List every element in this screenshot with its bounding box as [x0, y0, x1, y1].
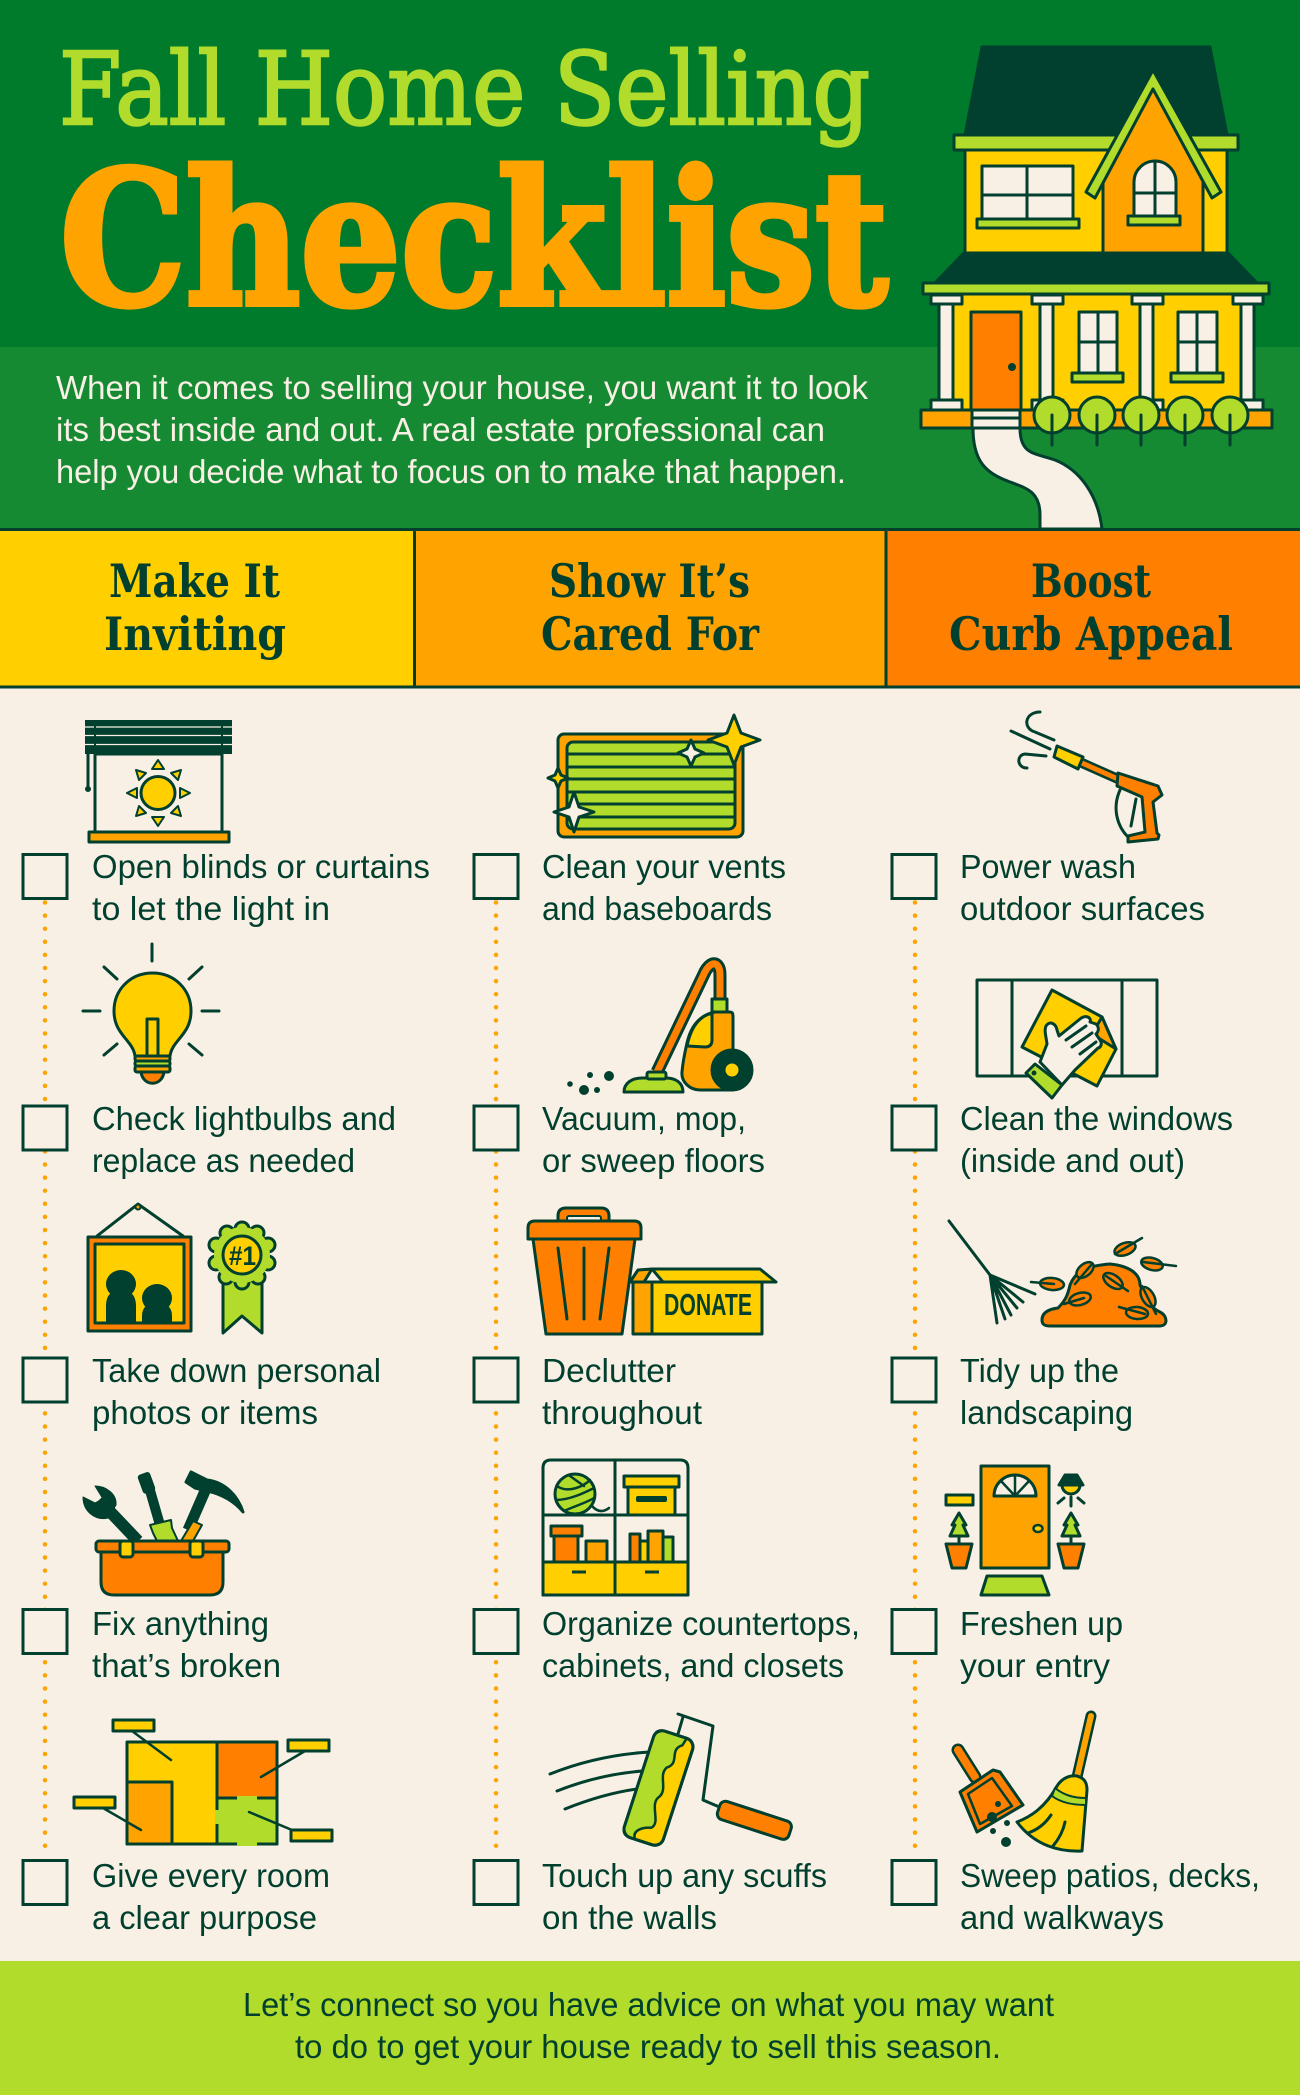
checklist item: entry: your entry: [960, 1647, 1111, 1684]
checklist item: power wash: outdoor surfaces: [960, 890, 1205, 927]
checklist item: lightbulbs: Check lightbulbs and: [92, 1100, 396, 1137]
gable: [1103, 87, 1203, 253]
gable trim: [1086, 70, 1221, 198]
column heading: Make It Inviting: Inviting: [104, 607, 286, 661]
icon: pressure washer: [1011, 712, 1162, 842]
checklist item: windows: Clean the windows: [960, 1100, 1233, 1137]
icon: vacuum cleaner: [567, 964, 752, 1095]
checklist item: scuffs: [474, 1857, 827, 1936]
checklist item: entry: Freshen up: [960, 1605, 1123, 1642]
icon: clean vent with sparkles: [548, 715, 760, 837]
checklist item: landscaping: landscaping: [960, 1394, 1133, 1431]
checklist item: declutter: throughout: [542, 1394, 702, 1431]
porch eave: [923, 283, 1269, 294]
column heading: Boost Curb Appeal: Boost: [1031, 554, 1152, 608]
upper left window: [977, 166, 1079, 228]
dotted connector: column 1: [43, 902, 47, 1858]
checklist item: organize: Organize countertops,: [542, 1605, 860, 1642]
checklist item: windows: (inside and out): [960, 1142, 1185, 1179]
front door: [971, 312, 1021, 410]
foundation: [921, 410, 1272, 428]
checklist item: personal photos: photos or items: [92, 1394, 318, 1431]
icon: front entry: [946, 1466, 1084, 1595]
lower windows: [1072, 312, 1223, 382]
checklist item: personal photos: Take down personal: [92, 1352, 381, 1389]
icon: broom and dustpan: [958, 1716, 1091, 1851]
porch columns: [931, 295, 1263, 410]
porch roof: [935, 253, 1257, 283]
checklist item: entry: [892, 1605, 1123, 1684]
lower wall: [953, 294, 1242, 410]
icon: number one ribbon: [209, 1222, 275, 1333]
icon: organized shelves: [543, 1460, 688, 1595]
checklist item: patios: [892, 1857, 1260, 1936]
icon: floor plan: [74, 1720, 332, 1844]
column heading: Show It's Cared For: [414, 530, 886, 687]
checklist item: landscaping: Tidy up the: [960, 1352, 1119, 1389]
checklist item: windows: [892, 1100, 1233, 1179]
checklist item: power wash: Power wash: [960, 848, 1136, 885]
footer call to action: [0, 1961, 1300, 2095]
icon: number one ribbon: #1: [229, 1241, 256, 1271]
dotted connector: column 2: [494, 902, 498, 1858]
steps: [972, 410, 1020, 428]
intro text: When it comes to selling your house, you want it to look: [56, 369, 868, 406]
footer call to action: to do to get your house ready to sell this season.: [295, 2028, 1001, 2065]
title line 1: Fall Home Selling: [59, 31, 870, 148]
icon: trash bin and donate box: [528, 1208, 776, 1334]
icon: lightbulb: [83, 944, 219, 1083]
icon: rake and leaf pile: [949, 1221, 1176, 1326]
header panel: [0, 0, 1300, 530]
icon: paint roller: [550, 1714, 793, 1848]
checklist item: open blinds: [23, 848, 430, 927]
checklist item: vacuum: Vacuum, mop,: [542, 1100, 746, 1137]
checklist item: room purpose: [23, 1857, 330, 1936]
checklist item: landscaping: [892, 1352, 1133, 1431]
illustration: house: [921, 47, 1272, 529]
walkway: [973, 428, 1102, 529]
checklist item: organize: [474, 1605, 860, 1684]
upper wall: [965, 150, 1227, 253]
footer call to action: Let’s connect so you have advice on what you may want: [243, 1986, 1054, 2023]
column heading: Make It Inviting: [0, 530, 414, 687]
checklist item: power wash: [892, 848, 1205, 927]
icon: family photo frame: [88, 1204, 191, 1331]
checklist item: fix anything: [23, 1605, 281, 1684]
upper roof: [965, 47, 1227, 135]
intro text: help you decide what to focus on to make that happen.: [56, 453, 846, 490]
checklist item: personal photos: [23, 1352, 381, 1431]
checklist item: vacuum: or sweep floors: [542, 1142, 765, 1179]
checklist item: lightbulbs: replace as needed: [92, 1142, 355, 1179]
checklist item: vacuum: [474, 1100, 765, 1179]
column heading: Show It's Cared For: Cared For: [541, 607, 760, 661]
checklist item: vents: [474, 848, 786, 927]
column heading: Make It Inviting: Make It: [109, 554, 281, 608]
checklist item: fix anything: Fix anything: [92, 1605, 269, 1642]
checklist item: scuffs: Touch up any scuffs: [542, 1857, 827, 1894]
checklist item: open blinds: to let the light in: [92, 890, 330, 927]
icon: hand cleaning a window: [977, 980, 1157, 1098]
checklist item: fix anything: that’s broken: [92, 1647, 281, 1684]
icon: window blinds with sun: [85, 720, 232, 842]
checklist item: patios: Sweep patios, decks,: [960, 1857, 1260, 1894]
intro text: [56, 369, 868, 490]
checklist item: vents: and baseboards: [542, 890, 772, 927]
checklist item: declutter: [474, 1352, 702, 1431]
checklist item: scuffs: on the walls: [542, 1899, 717, 1936]
checklist item: organize: cabinets, and closets: [542, 1647, 844, 1684]
shrubs: [1034, 397, 1248, 445]
checklist item: room purpose: a clear purpose: [92, 1899, 317, 1936]
checklist item: patios: and walkways: [960, 1899, 1164, 1936]
intro text: its best inside and out. A real estate professional can: [56, 411, 825, 448]
icon: toolbox: [83, 1471, 243, 1595]
column heading: Boost Curb Appeal: [886, 530, 1300, 687]
column heading: Show It's Cared For: Show It’s: [549, 554, 750, 608]
arched window: [1128, 161, 1180, 225]
checklist item: vents: Clean your vents: [542, 848, 786, 885]
upper eave: [954, 135, 1238, 150]
checklist item: room purpose: Give every room: [92, 1857, 330, 1894]
checklist item: lightbulbs: [23, 1100, 396, 1179]
dotted connector: column 3: [913, 902, 917, 1858]
column heading: Boost Curb Appeal: Curb Appeal: [949, 607, 1233, 661]
title line 2: Checklist: [60, 130, 888, 348]
checklist item: declutter: Declutter: [542, 1352, 676, 1389]
icon: trash bin and donate box: DONATE: [664, 1287, 752, 1322]
checklist item: open blinds: Open blinds or curtains: [92, 848, 430, 885]
